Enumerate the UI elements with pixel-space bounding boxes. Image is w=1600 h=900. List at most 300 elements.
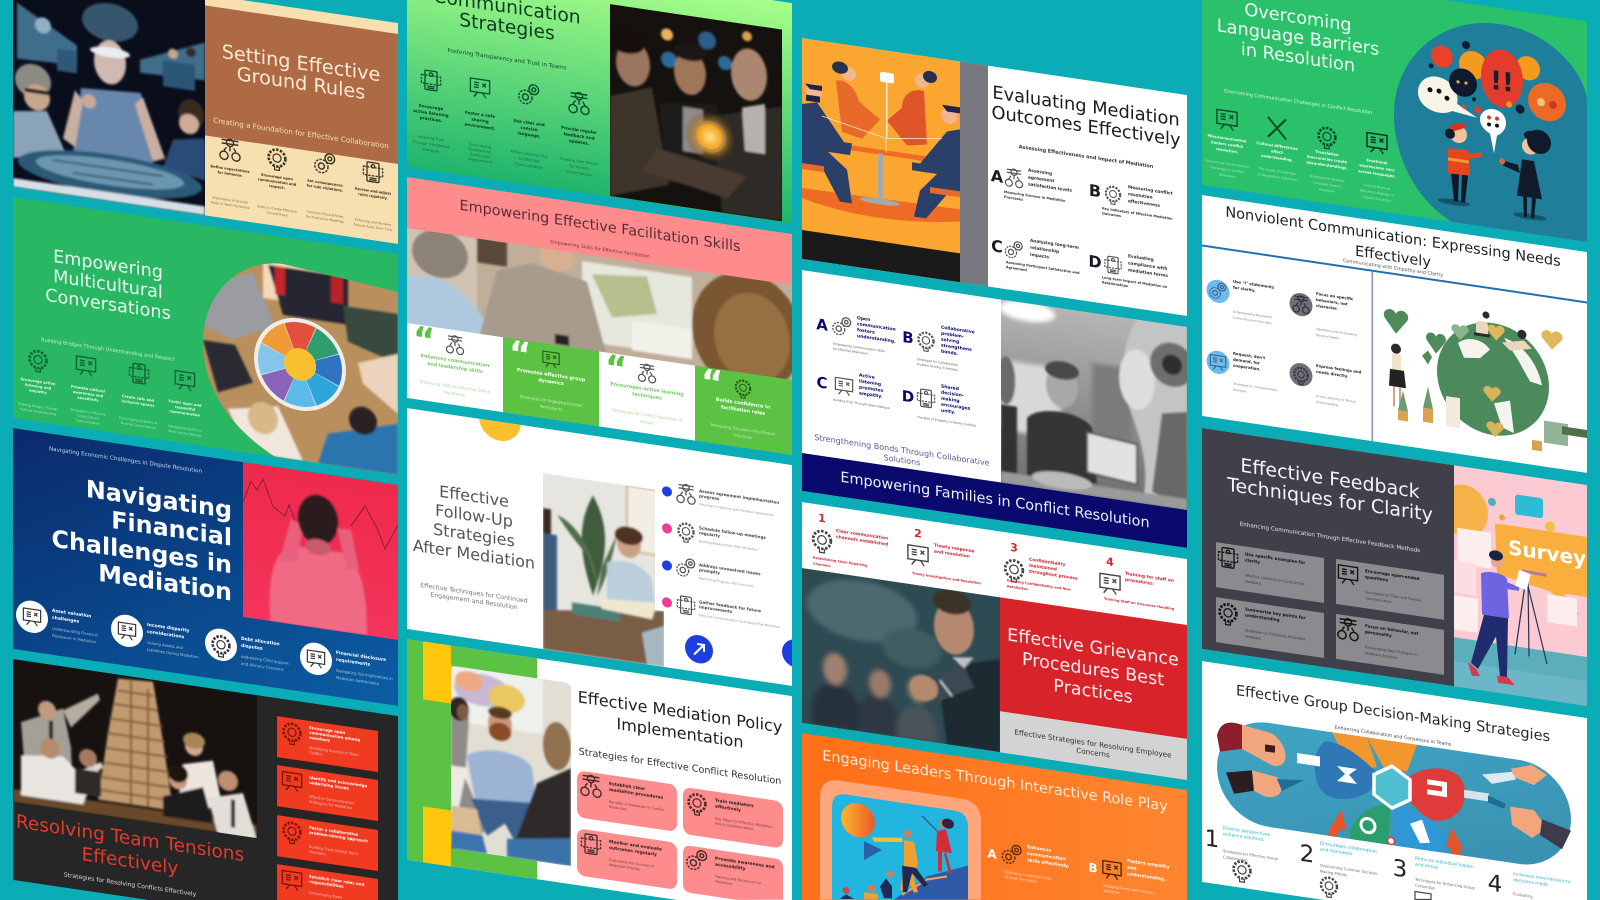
quote card 3: techniques bbox=[632, 391, 662, 402]
item: asset valuation: challenges bbox=[52, 615, 79, 625]
subtitle: Strategies for Resolving Conflicts Effectively bbox=[64, 872, 197, 898]
item 2 bbox=[1290, 287, 1357, 343]
illustration: green globe with hearts bbox=[1384, 296, 1587, 458]
item 3: Mediation bbox=[1319, 187, 1335, 194]
item 2: Continuous bbox=[470, 152, 490, 159]
list panel bbox=[655, 475, 792, 630]
quote card 4 bbox=[695, 361, 792, 455]
step 3: maintained bbox=[1029, 563, 1057, 573]
rule 3: for Productive Meetings bbox=[306, 214, 344, 224]
dark panel bbox=[1202, 428, 1454, 686]
card 1 bbox=[1216, 542, 1324, 603]
list item 3: Monitoring Progress and Outcomes bbox=[699, 576, 754, 588]
rule 1: Define expectations bbox=[210, 164, 250, 174]
title: Conversations bbox=[45, 286, 171, 324]
item: income disparity bbox=[111, 613, 199, 660]
subtitle panel bbox=[1000, 711, 1187, 780]
item 1: Encourage active bbox=[21, 377, 55, 386]
red title panel bbox=[1000, 597, 1187, 739]
illustration: teal disc bbox=[1394, 8, 1587, 242]
card 2 bbox=[683, 787, 783, 849]
title: Empowering Effective Facilitation Skills bbox=[459, 198, 741, 255]
item 1: Overcoming Communication bbox=[1205, 158, 1249, 169]
list item 4: improvements bbox=[699, 604, 733, 614]
slide: Evaluating Mediation Outcomes bbox=[802, 38, 1187, 316]
title: Techniques for Clarity bbox=[1226, 473, 1433, 526]
quote card 1: and leadership skills bbox=[427, 361, 483, 375]
step 4: Training for staff on bbox=[1125, 572, 1174, 584]
item C: listening bbox=[859, 378, 881, 388]
item 2: Communication bbox=[76, 418, 100, 426]
item 2: Feedback for bbox=[468, 147, 492, 155]
icon: gear bbox=[269, 148, 285, 171]
item 3: cooperation. bbox=[1233, 363, 1261, 372]
step 1: channels established bbox=[836, 534, 888, 548]
item 3: concise bbox=[520, 125, 538, 132]
rule 1: Importance of Ground bbox=[212, 196, 248, 205]
card 3: Building Trust Among Team bbox=[309, 845, 358, 856]
quote card 2 bbox=[503, 332, 599, 426]
step 1: Diverse perspectives bbox=[1223, 826, 1270, 838]
illustration frame bbox=[820, 778, 981, 900]
card 3 bbox=[277, 815, 378, 871]
title: Practices bbox=[1053, 676, 1133, 708]
quote card 3: Techniques for Conflict Resolution in bbox=[611, 407, 683, 423]
slide: Overcoming Language Barriers bbox=[1202, 0, 1587, 242]
item B: Fosters empathy bbox=[1127, 859, 1170, 870]
slide: Empowering Multicultural Conversations bbox=[13, 197, 398, 475]
item D: encourages bbox=[941, 402, 971, 412]
item B: bonds. bbox=[941, 349, 958, 357]
item 3: Active Listening: Key bbox=[510, 149, 549, 159]
item A bbox=[987, 838, 1070, 889]
card 3: Foster a collaborative bbox=[309, 825, 358, 837]
title: Resolving Team Tensions bbox=[16, 812, 244, 866]
subtitle: Empowering Skills for Effective Facilitation bbox=[550, 239, 650, 260]
card 1: communication among bbox=[309, 730, 360, 742]
item: debt allocation: disputes bbox=[241, 643, 263, 652]
item 3: Translation bbox=[1315, 150, 1339, 157]
item 2: Identifying and Articulating bbox=[1316, 327, 1357, 337]
item 1: Fostering Trust bbox=[418, 135, 445, 143]
subtitle: Strategies for Effective Conflict Resolution bbox=[579, 746, 781, 787]
card 2: Effective Communication bbox=[309, 795, 354, 805]
title: Nonviolent Communication: Expressing Needs bbox=[1225, 204, 1561, 270]
item 3 bbox=[1206, 347, 1277, 398]
card 4: Encouraging Open bbox=[309, 891, 342, 900]
item 3: Use clear and bbox=[513, 118, 545, 127]
card 2: Strategies for Mediation bbox=[309, 800, 352, 810]
step 2: Timely response bbox=[934, 544, 975, 555]
slide: Effective Group Decision-Making bbox=[1202, 661, 1587, 900]
step 1: 1 bbox=[818, 511, 826, 526]
title: Strategies bbox=[459, 10, 555, 45]
item 1: Building Bridges Through bbox=[18, 402, 58, 412]
icon: org tree bbox=[220, 138, 240, 162]
item B bbox=[1088, 852, 1170, 900]
item: financial disclosure: Navigating Tax Implications in bbox=[336, 668, 393, 681]
quote card 2: dynamics bbox=[538, 377, 564, 387]
slide: Effective Grievance Procedures bbox=[802, 502, 1187, 780]
item B: solving bbox=[941, 337, 959, 345]
icon: cog bbox=[30, 350, 46, 373]
item 2: Personal Needs bbox=[1316, 333, 1339, 340]
button: clipped blue bbox=[782, 638, 810, 670]
icon: board bbox=[76, 356, 96, 377]
green block bbox=[407, 639, 537, 879]
quote card 1: “ bbox=[413, 319, 435, 362]
quote card 2: “ bbox=[509, 333, 531, 376]
item 4: feedback and bbox=[563, 131, 595, 141]
subtitle: Navigating Economic Challenges in Dispute Resolution bbox=[49, 446, 202, 475]
card 4: accessibility bbox=[715, 862, 746, 872]
quote card 2: Strategies for Engaging Diverse bbox=[520, 394, 583, 408]
item A: Empowering Communication Skills bbox=[833, 342, 885, 353]
subtitle: Overcoming Communication Challenges in Conflict Resolution bbox=[1224, 88, 1372, 116]
card 2: Encourage open-ended bbox=[1365, 568, 1420, 581]
item D: Shared bbox=[941, 385, 959, 392]
icon: hand with chart bbox=[519, 83, 539, 105]
item C: Assessing Participant Satisfaction and bbox=[1006, 260, 1080, 275]
item A bbox=[991, 162, 1072, 209]
card 1: Benefits of Mediation in Conflict bbox=[609, 800, 665, 812]
item 4: for Honest bbox=[570, 164, 589, 171]
title: Effective Feedback bbox=[1240, 454, 1420, 503]
item B: and bbox=[1127, 865, 1136, 872]
rule 1: for behavior. bbox=[218, 170, 242, 178]
rule 4: Review and adjust bbox=[355, 187, 391, 196]
step 3: Retaliation bbox=[1007, 584, 1029, 592]
card 2: underlying issues bbox=[309, 780, 349, 791]
item D: Long-term Impact of Mediation on bbox=[1102, 275, 1168, 289]
item 2: sensitivity bbox=[77, 396, 99, 403]
title: Effective Group Decision-Making Strategies bbox=[1236, 682, 1550, 745]
rule 2: communication and bbox=[258, 177, 297, 187]
title: Procedures Best bbox=[1022, 650, 1164, 691]
item 3: Dialogue bbox=[1233, 388, 1246, 394]
item: asset valuation: Disclosure in Mediation bbox=[52, 633, 97, 644]
card 4 bbox=[1336, 614, 1444, 675]
card 4: Training and Resources for bbox=[714, 874, 762, 885]
columns bbox=[18, 346, 202, 441]
title: Engaging Leaders Through Interactive Role Play bbox=[822, 748, 1168, 815]
title band bbox=[407, 177, 792, 285]
item 2: environment. bbox=[465, 122, 496, 131]
step 4 bbox=[1100, 554, 1175, 611]
grey divider bbox=[960, 61, 988, 287]
list item 2 bbox=[662, 520, 766, 554]
item 3: Strategies for Compassionate bbox=[1233, 382, 1277, 392]
step 1: Clear communication bbox=[836, 529, 888, 542]
item C bbox=[816, 366, 890, 410]
card 4: Promote awareness and bbox=[715, 857, 775, 870]
item 1: empathy bbox=[29, 388, 48, 395]
item B: strengthens bbox=[941, 343, 972, 353]
columns bbox=[1205, 107, 1396, 204]
photo: mediator at desk bbox=[543, 473, 664, 667]
subtitle: Building Bridges Through Understanding and Respect bbox=[41, 337, 175, 363]
item B: resolution bbox=[1128, 191, 1153, 201]
icon: building bbox=[175, 371, 195, 391]
item A: Enhances bbox=[1027, 845, 1051, 854]
item A: A bbox=[816, 315, 828, 335]
icon: cog bbox=[1319, 127, 1335, 150]
step 3: Ensuring Confidentiality and Non- bbox=[1007, 578, 1072, 592]
item: financial disclosure: Financial disclosure bbox=[336, 651, 386, 663]
item 1: Cultural Understanding bbox=[20, 407, 56, 416]
item B bbox=[902, 319, 975, 375]
item A: Enhancing Leadership Skills bbox=[1004, 870, 1051, 881]
step 4 bbox=[1488, 867, 1571, 900]
card 4: Mediators bbox=[715, 880, 732, 886]
item: financial disclosure: requirements bbox=[336, 657, 371, 668]
card 3: outcomes regularly bbox=[609, 845, 657, 858]
title: Strategies bbox=[433, 520, 515, 551]
icon: chart board bbox=[1217, 109, 1237, 131]
list item 2: Schedule follow-up meetings bbox=[699, 525, 766, 540]
item B: Strategies for Collaborative bbox=[917, 357, 958, 367]
subtitle: Creating a Foundation for Effective Collaboration bbox=[213, 116, 389, 151]
title: Effective Grievance bbox=[1007, 625, 1179, 671]
step 1: enhance solutions bbox=[1223, 831, 1264, 843]
subtitle: Concerns bbox=[1076, 746, 1110, 760]
title: Multicultural bbox=[53, 267, 163, 303]
card 1: Encourage open bbox=[309, 725, 345, 735]
card 4 bbox=[683, 845, 783, 900]
item A: fosters bbox=[857, 327, 875, 336]
item 4: Navigating Conflict in bbox=[168, 424, 202, 433]
item D: D bbox=[902, 387, 914, 407]
item 2: sharing bbox=[471, 117, 489, 124]
item 2: understanding. bbox=[1261, 154, 1294, 163]
item B: B bbox=[1088, 860, 1098, 876]
item A: Processes bbox=[1004, 195, 1023, 202]
quote card 1: Enhancing Skills for Effective Online bbox=[420, 379, 491, 394]
item: asset valuation: Asset valuation bbox=[52, 609, 91, 620]
item C: empathy. bbox=[859, 390, 883, 400]
card 4: Establish clear roles and bbox=[309, 874, 364, 887]
subtitle: Fostering Transparency and Trust in Teams bbox=[447, 48, 567, 72]
title: Empowering Families in Conflict Resolution bbox=[840, 470, 1150, 531]
item 1: Understanding Nonviolent bbox=[1233, 310, 1273, 319]
item A bbox=[816, 309, 896, 360]
step 2 bbox=[908, 526, 981, 586]
card 3: problem-solving approach bbox=[309, 830, 368, 844]
item: debt allocation: Debt allocation bbox=[241, 637, 280, 647]
icon: tools bbox=[1268, 117, 1286, 139]
step 4: Evaluating bbox=[1513, 892, 1533, 899]
rule 2: Encourage open bbox=[261, 173, 293, 181]
list item 3: promptly bbox=[699, 567, 720, 575]
icon: screen bbox=[1367, 133, 1387, 154]
title: Implementation bbox=[617, 714, 743, 752]
step 3: Reduces individual biases bbox=[1415, 857, 1473, 870]
step 2: Making Pitfalls bbox=[1320, 869, 1347, 877]
title: Effective bbox=[439, 482, 509, 511]
item: income disparity: Income disparity bbox=[147, 623, 189, 634]
ground rule columns bbox=[210, 136, 392, 233]
step 4: Training Staff on Grievance Handling bbox=[1104, 597, 1175, 611]
icon: board bbox=[470, 78, 490, 99]
item B: Outcomes bbox=[1102, 211, 1121, 218]
item 2: awareness and bbox=[73, 390, 104, 398]
step 4: 4 bbox=[1488, 870, 1502, 898]
item 3: Create safe and bbox=[122, 394, 154, 403]
card 1: Conflict bbox=[309, 751, 323, 757]
slide: Engaging Leaders Through Role Play bbox=[802, 733, 1187, 900]
quote card 4: facilitation roles bbox=[721, 404, 765, 417]
item 1: resolution. bbox=[1216, 147, 1239, 154]
illustration: survey presenter bbox=[1440, 481, 1587, 706]
slide: Empowering Families bbox=[802, 265, 1194, 549]
illustration: capsule with hands and petals bbox=[1217, 715, 1571, 872]
photo: three men with glowing bulb bbox=[610, 4, 782, 222]
item A: Open bbox=[857, 316, 870, 323]
item 2: Encouraging bbox=[469, 142, 491, 149]
item 4: Conversations bbox=[566, 170, 592, 177]
item D: unity. bbox=[941, 408, 956, 416]
card 3 bbox=[577, 828, 677, 890]
item A: Through Simulation bbox=[1003, 875, 1037, 884]
item 4: Affecting Language in bbox=[1360, 188, 1394, 197]
quote card 2: Participants bbox=[540, 404, 562, 412]
item A: Assessing bbox=[1028, 168, 1052, 177]
item 1 bbox=[1206, 275, 1275, 326]
step 3: 3 bbox=[1393, 855, 1407, 883]
list item 3: Address unresolved issues bbox=[699, 562, 761, 576]
item D: Relationships bbox=[1102, 280, 1128, 288]
card 1: Use specific examples for bbox=[1245, 551, 1305, 565]
step 4: Increases commitment to bbox=[1513, 872, 1570, 886]
step 3 bbox=[1005, 540, 1078, 599]
item B: problem- bbox=[941, 331, 964, 340]
step 1: Strategies for Effective Group bbox=[1223, 849, 1279, 861]
item 4: across languages. bbox=[1358, 169, 1396, 179]
list item 1: Ensuring Compliance with Mediator Agreements bbox=[699, 502, 774, 517]
item: asset valuation bbox=[16, 598, 98, 645]
item 1: Dialogue bbox=[423, 147, 440, 154]
quote card 1: Facilitation bbox=[445, 390, 466, 398]
item 4: Foster open and bbox=[169, 399, 201, 408]
quote card 1 bbox=[407, 318, 503, 412]
item: asset valuation: Understanding Financial bbox=[52, 626, 98, 638]
rule 1: Rules in Team Dynamics bbox=[211, 200, 250, 210]
item 1: hinders conflict bbox=[1211, 140, 1243, 149]
illustration: team climbing bbox=[832, 792, 968, 900]
title: Language Barriers bbox=[1217, 15, 1379, 60]
quote card 3: Encourages active learning bbox=[610, 382, 684, 398]
item: income disparity: Liabilities During Mediation bbox=[147, 647, 199, 660]
title: Effectively bbox=[1355, 243, 1431, 271]
card 1: Effective Listening for Constructive bbox=[1245, 573, 1305, 586]
rule 3: Common Ground Rules bbox=[307, 209, 344, 219]
item C: impacts bbox=[1030, 252, 1049, 261]
subtitle: Effective Techniques for Continued bbox=[420, 582, 528, 605]
step 2: Overcoming Common Decision- bbox=[1320, 863, 1379, 876]
item 4: respectful bbox=[175, 405, 195, 412]
item 1: Use "I" statements bbox=[1233, 279, 1274, 290]
list item 2: regularly bbox=[699, 530, 720, 538]
step 2: 2 bbox=[1300, 841, 1314, 869]
card 3: Monitor and evaluate bbox=[609, 840, 662, 853]
rule 2: Ground Rules bbox=[266, 211, 288, 218]
item C bbox=[991, 232, 1080, 280]
illustration: speech bubbles and two people bbox=[1418, 34, 1566, 225]
card 2: Key Steps for Effective Mediation bbox=[715, 817, 773, 829]
item 3: misunderstandings. bbox=[1306, 160, 1348, 171]
quote card 1: Enhances communication bbox=[421, 354, 489, 369]
item A: agreement bbox=[1028, 174, 1054, 184]
item 2: affect bbox=[1271, 149, 1283, 155]
item: financial disclosure: Mediation Settlements bbox=[336, 675, 379, 686]
list item 4 bbox=[662, 593, 780, 629]
item: debt allocation: Addressing Child Support bbox=[241, 654, 289, 666]
list item 1: progress bbox=[699, 493, 720, 501]
title: Ground Rules bbox=[237, 62, 365, 104]
photo: jenga tower and team bbox=[13, 659, 257, 838]
photo: facilitator with map bbox=[407, 228, 792, 380]
card 1: members bbox=[309, 735, 331, 743]
card 1: Feedback bbox=[1245, 579, 1261, 586]
item 1: Encourage bbox=[419, 103, 443, 111]
rule 2: Steps to Create Effective bbox=[257, 204, 297, 214]
card 2: effectively bbox=[715, 804, 741, 813]
step 4: 4 bbox=[1106, 555, 1114, 569]
title: Evaluating Mediation bbox=[992, 82, 1180, 131]
slide: Effective Mediation Policy Implementation bbox=[407, 639, 792, 900]
item B: Measuring conflict bbox=[1128, 185, 1173, 197]
step 1: Collaboration bbox=[1223, 855, 1248, 863]
card 1: Establish clear bbox=[609, 782, 645, 792]
button: next arrow bbox=[685, 633, 713, 665]
item 3: inaccuracies create bbox=[1307, 155, 1348, 165]
slide: Nonviolent Communication bbox=[1202, 195, 1587, 473]
step 3: Techniques for Enhancing Group bbox=[1414, 877, 1475, 890]
icon: device bbox=[129, 363, 149, 385]
list item 3 bbox=[662, 555, 761, 589]
card 4: personality bbox=[1365, 629, 1392, 638]
list item 1: Assess agreement implementation bbox=[699, 488, 779, 505]
item D: mediation terms bbox=[1128, 267, 1168, 279]
item A: skills effectively. bbox=[1027, 857, 1070, 870]
rule 4: Ground Rules Over Time bbox=[354, 222, 392, 232]
title: Empowering bbox=[53, 247, 163, 283]
title: Follow-Up bbox=[435, 501, 513, 531]
card 3: Feedback bbox=[1245, 634, 1261, 641]
item 1: Through Transparent bbox=[411, 140, 450, 149]
item C: Analyzing long-term bbox=[1030, 239, 1079, 251]
card 2: Techniques for Clear and Concise bbox=[1364, 590, 1421, 602]
subtitle: Engagement and Resolution bbox=[430, 591, 518, 611]
card 4 bbox=[277, 864, 378, 900]
step 2: Encourages collaboration bbox=[1320, 841, 1377, 855]
item 3: Communication bbox=[515, 162, 543, 170]
item B: Scenarios bbox=[1103, 889, 1120, 895]
card 3: Evaluating the Success of bbox=[609, 858, 655, 869]
card 1 bbox=[277, 716, 378, 772]
step 2 bbox=[1300, 837, 1379, 900]
item A: communication bbox=[1027, 851, 1066, 863]
header band bbox=[205, 5, 398, 164]
title: Setting Effective bbox=[222, 40, 380, 86]
yellow blocks bbox=[423, 641, 451, 867]
item 3: to Effective bbox=[519, 157, 540, 164]
item 4: expressions vary bbox=[1359, 163, 1395, 173]
item D bbox=[902, 378, 977, 428]
card 1: clarity bbox=[1245, 557, 1260, 565]
item B: B bbox=[902, 328, 914, 348]
subtitle: Communicating with Empathy and Clarity bbox=[1343, 258, 1443, 279]
